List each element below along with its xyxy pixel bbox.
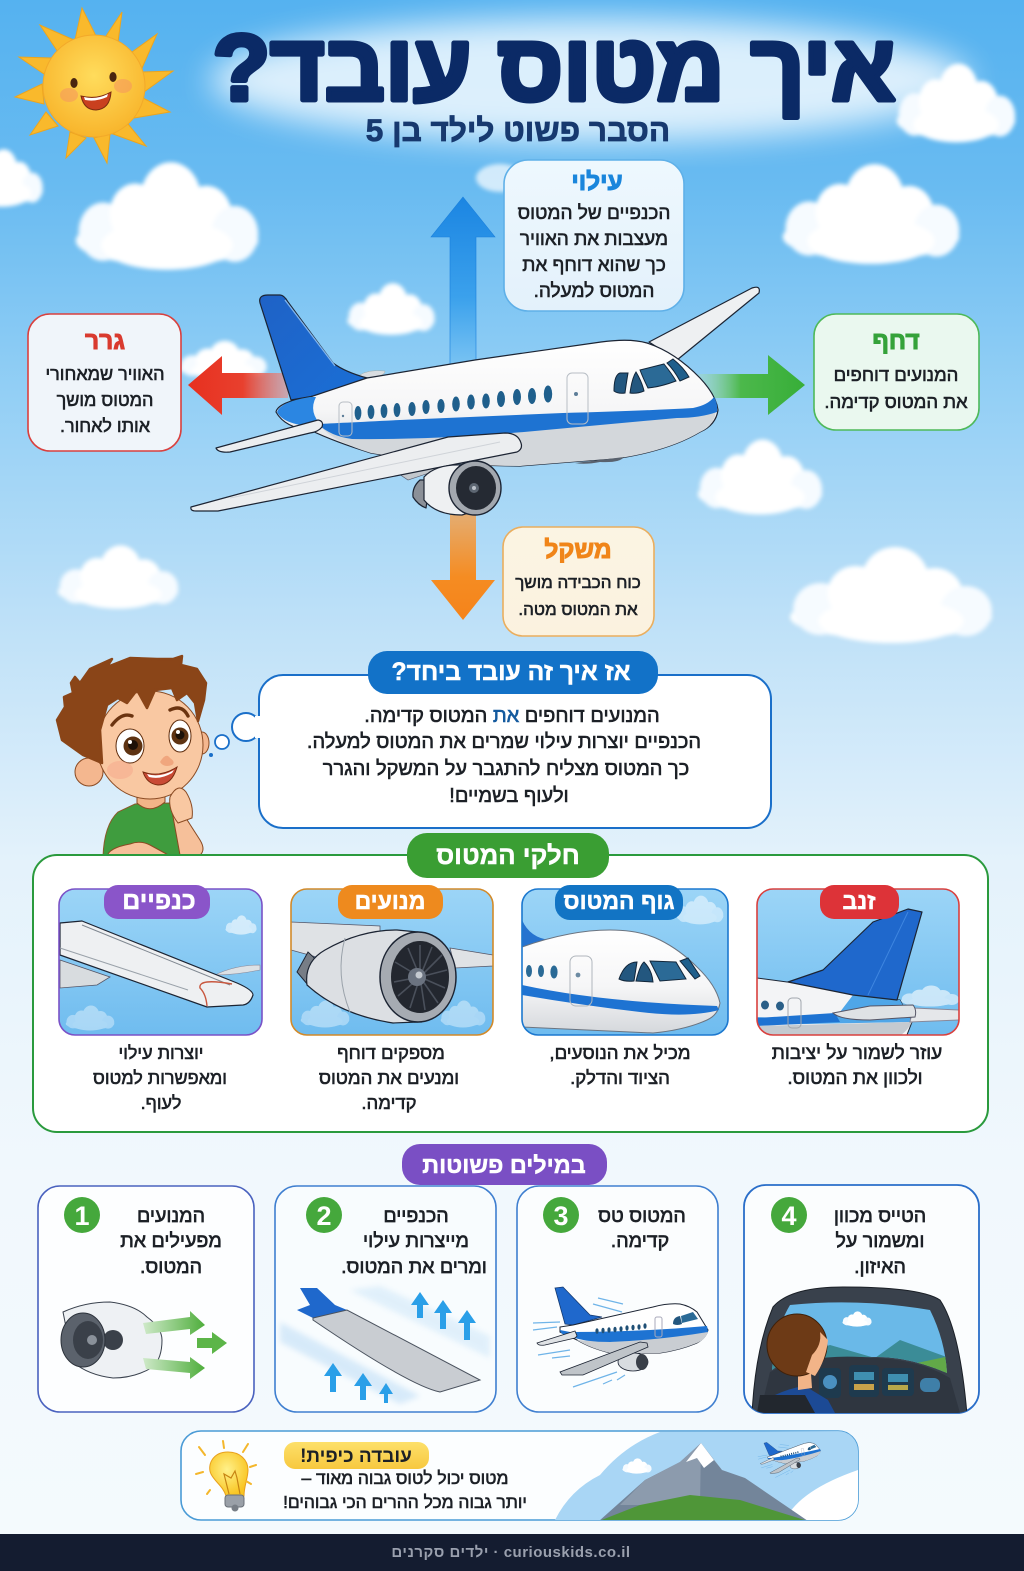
panel: together explanation: המנועים דוחפים את המטוס קדימה.	[364, 705, 660, 727]
step 2 card	[275, 1186, 496, 1412]
airplane illustration	[191, 287, 759, 515]
caption: wings: לעוף.	[141, 1093, 181, 1113]
callout: drag: גרר	[85, 328, 125, 355]
title: איך מטוס עובד?	[213, 15, 895, 120]
thought bubble dots	[209, 735, 229, 757]
icon: sun	[15, 8, 173, 163]
step 3 card: קדימה.	[611, 1230, 669, 1252]
step 3 card	[517, 1186, 718, 1412]
caption: tail	[772, 1043, 942, 1089]
badge: fun fact	[284, 1442, 429, 1469]
caption: tail: עוזר לשמור על יציבות	[772, 1043, 942, 1064]
arrow: lift up	[431, 197, 495, 365]
step 1 card	[38, 1186, 254, 1412]
engine	[413, 461, 501, 515]
clouds	[0, 18, 1015, 643]
callout: weight: את המטוס מטה.	[518, 600, 638, 619]
panel: airplane parts	[33, 855, 988, 1132]
callout: thrust: את המטוס קדימה.	[824, 391, 968, 412]
step 2 card: מייצרות עילוי	[363, 1230, 469, 1252]
arrow: drag left	[188, 356, 288, 415]
heading pill: together: אז איך זה עובד ביחד?	[392, 659, 631, 686]
caption: tail: ולכוון את המטוס.	[787, 1068, 923, 1089]
footer bar	[0, 1534, 1024, 1571]
heading pill: parts: חלקי המטוס	[436, 842, 580, 870]
panel: together explanation: ולעוף בשמיים!	[449, 785, 569, 807]
arrow: thrust right	[698, 355, 805, 415]
caption: wings: יוצרות עילוי	[119, 1043, 203, 1063]
step 1 card: המטוס.	[140, 1256, 202, 1278]
card: wings: כנפיים	[122, 887, 196, 915]
callout: lift: מעצבות את האוויר	[520, 229, 668, 250]
icon: wing with lift arrows	[280, 1286, 490, 1404]
step 1 card: מפעילים את	[120, 1230, 222, 1252]
caption: engines: מספקים דוחף	[337, 1042, 445, 1063]
callout: thrust: דחף	[872, 328, 920, 355]
callout: lift: עילוי	[571, 169, 623, 196]
caption: fuselage	[549, 1042, 691, 1088]
callout: drag	[28, 314, 181, 451]
callout: lift	[504, 160, 684, 311]
card: engines	[291, 885, 493, 1035]
subtitle: הסבר פשוט לילד בן 5	[366, 112, 670, 148]
callout: lift: כך שהוא דוחף את	[522, 255, 666, 276]
step 2 card: 2	[316, 1201, 332, 1231]
caption: engines: קדימה.	[361, 1092, 417, 1113]
panel: together explanation: הכנפיים יוצרות עילוי שמרים את המטוס למעלה.	[307, 731, 701, 753]
callout: weight: כוח הכבידה מושך	[515, 573, 641, 592]
step 4 card: הטייס מכוון	[834, 1205, 926, 1227]
caption: fuselage: הציוד והדלק.	[570, 1067, 670, 1088]
step 3 card: המטוס טס	[598, 1205, 686, 1227]
callout: weight: משקל	[544, 537, 612, 564]
badge: fun fact: עובדה כיפית!	[300, 1446, 412, 1467]
callout: thrust	[814, 314, 979, 430]
card: tail: זנב	[842, 888, 876, 914]
icon: light bulb	[196, 1441, 256, 1512]
heading pill: in simple words	[402, 1144, 607, 1185]
step 4 card: האיזון.	[854, 1256, 906, 1278]
caption: wings	[93, 1043, 227, 1113]
caption: engines: ומנעים את המטוס	[319, 1067, 459, 1088]
panel: fun fact: מטוס יכול לטוס גבוה מאוד –	[302, 1468, 508, 1488]
card: fuselage	[522, 885, 728, 1035]
callout: drag: אותו לאחור.	[60, 416, 151, 436]
card: wings	[59, 885, 262, 1035]
icon: engine with arrows	[61, 1302, 227, 1379]
icon: flying plane	[533, 1287, 708, 1387]
step 1 card: 1	[74, 1201, 90, 1231]
footer bar: curiouskids.co.il · ילדים סקרנים	[391, 1544, 631, 1561]
caption: wings: ומאפשרות למטוס	[93, 1068, 227, 1088]
step 1 card: המנועים	[137, 1205, 205, 1227]
callout: thrust: המנועים דוחפים	[834, 364, 958, 385]
step 2 card: הכנפיים	[383, 1205, 449, 1227]
card: fuselage: גוף המטוס	[564, 888, 674, 914]
callout: drag: האוויר שמאחורי	[46, 364, 164, 384]
heading pill: in simple words: במילים פשוטות	[422, 1152, 586, 1178]
callout: lift: הכנפיים של המטוס	[518, 203, 670, 224]
illustration: mountain and plane	[555, 1431, 858, 1521]
step 2 card: ומרים את המטוס.	[341, 1256, 487, 1278]
panel: fun fact	[181, 1431, 858, 1521]
caption: fuselage: מכיל את הנוסעים,	[549, 1042, 691, 1063]
callout: drag: המטוס מושך	[57, 390, 153, 410]
arrow: weight down	[431, 513, 495, 620]
icon: small plane	[756, 1435, 823, 1480]
heading pill: parts	[407, 833, 609, 878]
card: engines: מנועים	[355, 888, 425, 914]
step 4 card: 4	[781, 1201, 797, 1231]
step 3 card: 3	[553, 1201, 569, 1231]
card: tail	[757, 885, 960, 1040]
panel: together explanation	[232, 675, 771, 828]
step 4 card: ומשמור על	[836, 1230, 924, 1252]
heading pill: together	[368, 651, 658, 694]
callout: weight	[503, 527, 654, 636]
panel: together explanation: כך המטוס מצליח להתגבר על המשקל והגרר	[323, 758, 689, 780]
character: thinking boy	[57, 656, 209, 857]
step 4 card	[744, 1185, 979, 1415]
panel: fun fact: יותר גבוה מכל ההרים הכי גבוהים!	[283, 1492, 527, 1512]
callout: lift: המטוס למעלה.	[534, 281, 654, 302]
caption: engines	[319, 1042, 459, 1113]
illustration: cockpit	[752, 1287, 967, 1415]
